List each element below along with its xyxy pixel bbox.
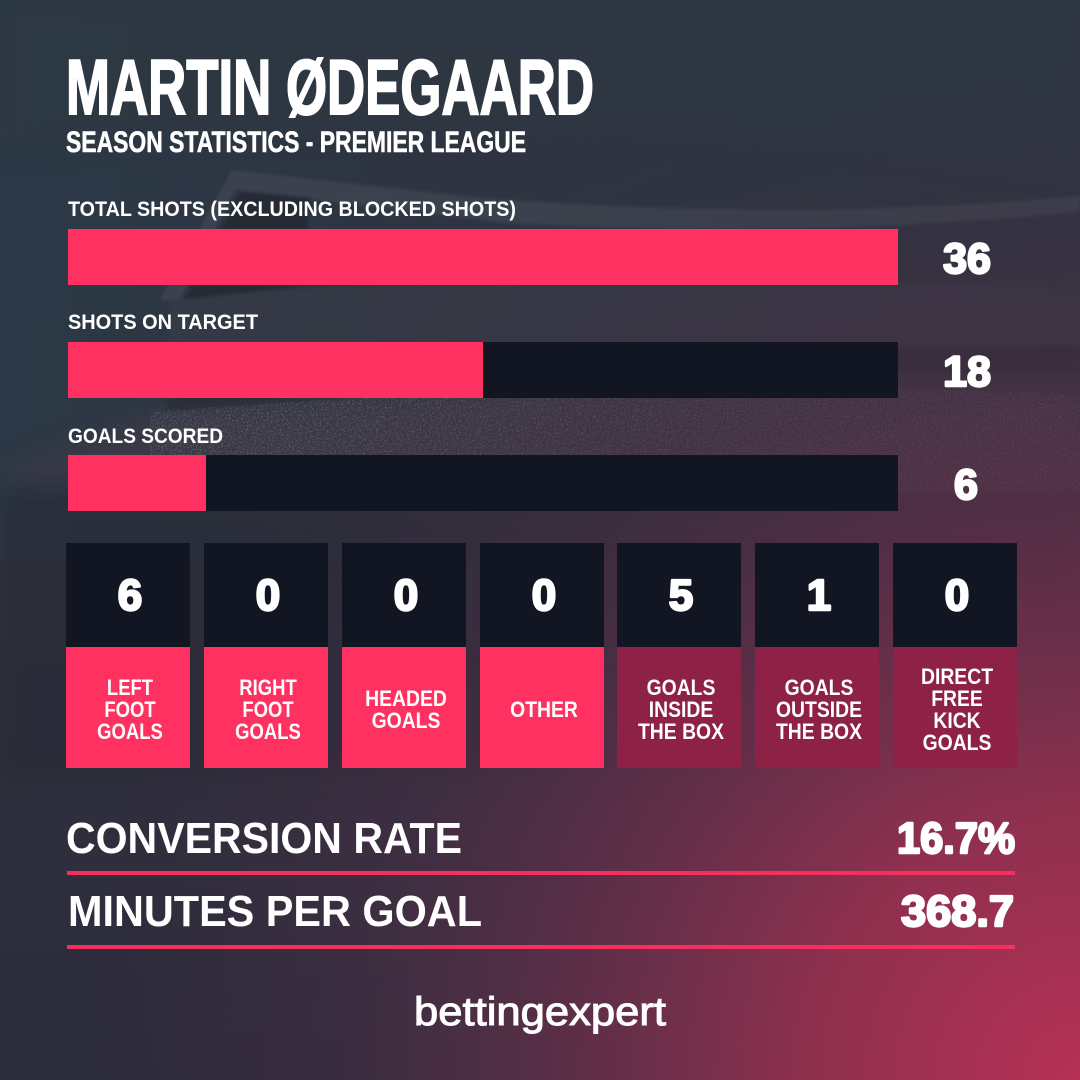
card: direct free kick goals: FREE [931,687,983,711]
card: right foot goals: RIGHT [239,677,297,700]
card: goals inside the box: 5 [669,571,693,620]
card: direct free kick goals: 0 [945,571,969,620]
card: goals inside the box: THE BOX [638,720,724,744]
card: left foot goals [66,543,190,768]
card: headed goals: GOALS [372,709,441,733]
subtitle: SEASON STATISTICS - PREMIER LEAGUE [66,126,526,159]
bar: total shots: TOTAL SHOTS (EXCLUDING BLOCKED SHOTS) [68,198,516,221]
stat: conversion rate: CONVERSION RATE [66,814,462,863]
card: headed goals: 0 [394,571,418,620]
card: right foot goals: FOOT [242,699,294,722]
stat: minutes per goal: MINUTES PER GOAL [68,887,482,936]
card: direct free kick goals [893,543,1017,768]
card: direct free kick goals: DIRECT [921,665,993,689]
card: headed goals [342,543,466,768]
stat: conversion rate: 16.7% [897,814,1015,863]
card: right foot goals: GOALS [235,721,301,744]
bar: shots on target [68,311,991,398]
card: goals inside the box: GOALS [647,676,716,700]
bar: goals scored: 6 [954,461,978,509]
card: goals outside the box [755,543,879,768]
bar: goals scored [68,425,978,511]
card: goals outside the box: GOALS [785,676,854,700]
card: goals inside the box [617,543,741,768]
card: right foot goals [204,543,328,768]
card: other: 0 [532,571,556,620]
card: left foot goals: FOOT [104,699,156,722]
stat: minutes per goal [67,887,1015,949]
card: left foot goals: LEFT [107,677,154,700]
card: other [480,543,604,768]
card: goals outside the box: OUTSIDE [776,698,862,722]
card: right foot goals: 0 [256,571,280,620]
stat: conversion rate [66,814,1015,875]
bar: shots on target: SHOTS ON TARGET [68,311,258,334]
title: MARTIN ØDEGAARD [66,43,594,131]
card: direct free kick goals: KICK [933,709,981,733]
card: left foot goals: 6 [118,571,142,620]
logo: bettingexpert: bettingexpert [414,990,666,1034]
card: goals outside the box: THE BOX [776,720,862,744]
bar: goals scored: GOALS SCORED [68,425,223,448]
card: left foot goals: GOALS [97,721,163,744]
bar: shots on target: 18 [943,348,991,396]
card: other: OTHER [510,698,578,722]
card: direct free kick goals: GOALS [923,731,992,755]
card: goals outside the box: 1 [807,571,831,620]
bar: total shots [68,198,991,285]
card: headed goals: HEADED [365,687,447,711]
card: goals inside the box: INSIDE [649,698,713,722]
stat: minutes per goal: 368.7 [901,887,1014,936]
bar: total shots: 36 [943,235,991,283]
